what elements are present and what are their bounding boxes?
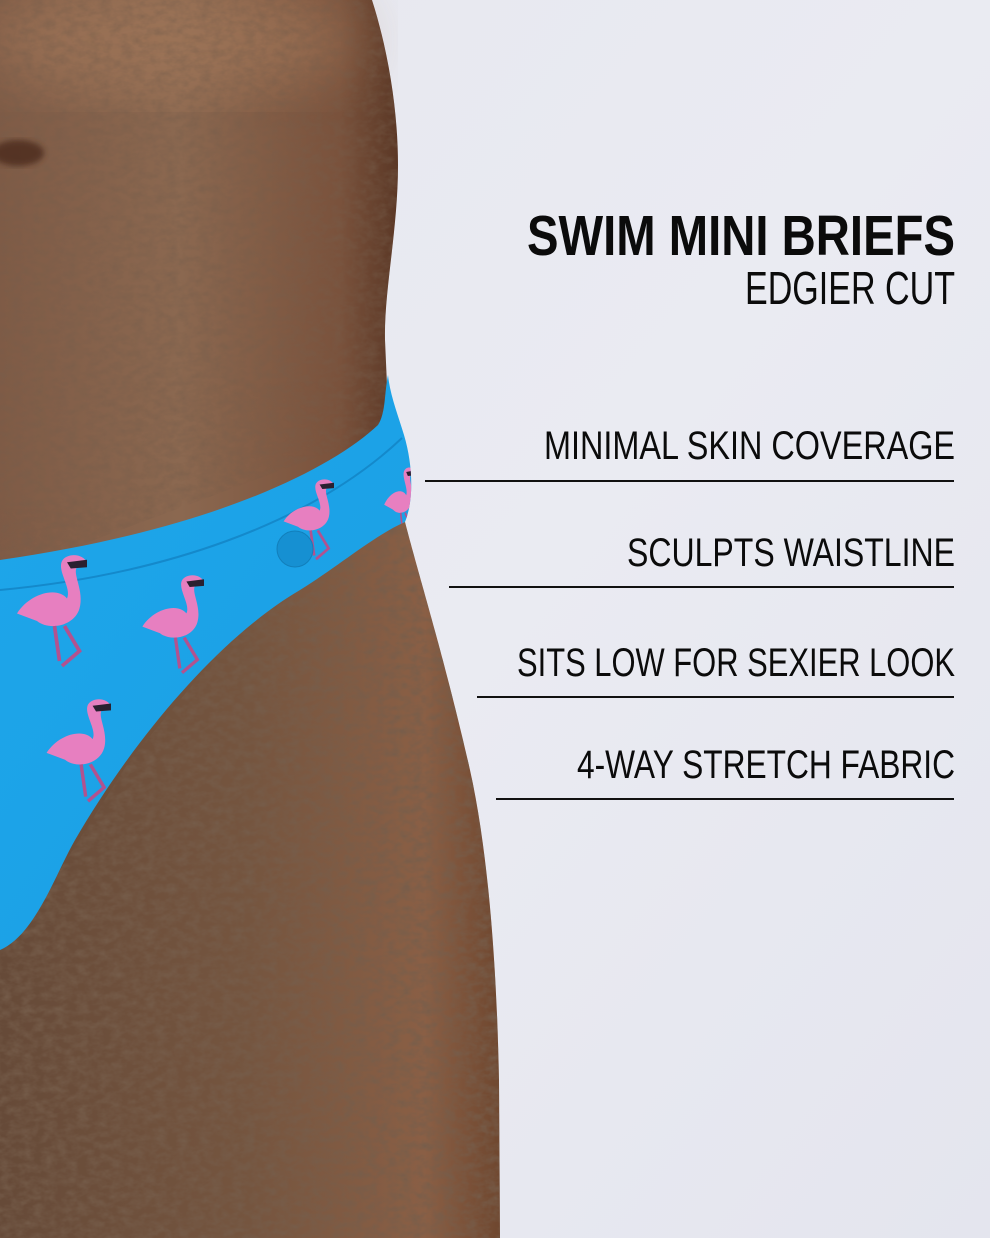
upper body — [0, 0, 400, 700]
leg texture — [0, 520, 510, 1238]
chest highlight — [0, 0, 360, 100]
navel — [0, 140, 44, 166]
leg — [0, 522, 500, 1238]
upper body texture — [8, 0, 398, 513]
logo button — [277, 531, 313, 567]
swim brief — [0, 375, 415, 950]
figure photo area — [0, 0, 510, 1238]
flamingo print — [17, 467, 415, 801]
waistband seam — [0, 438, 402, 590]
